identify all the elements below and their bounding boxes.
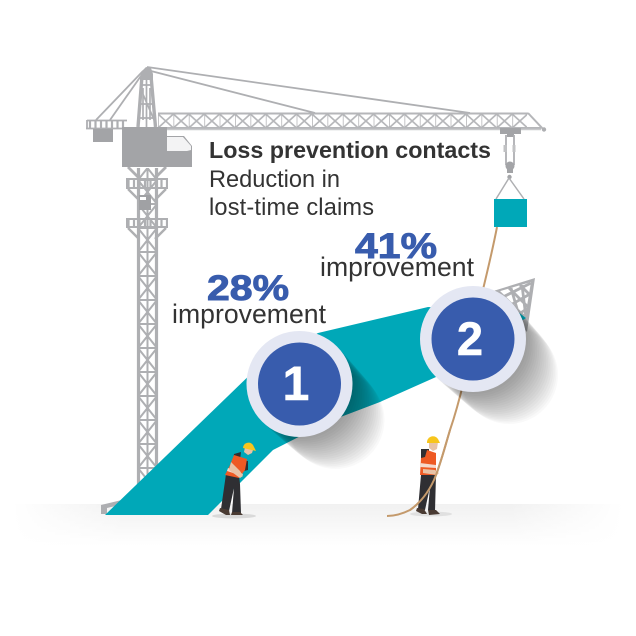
crane foot	[101, 498, 130, 514]
stat: 28% improvement	[172, 269, 327, 329]
stat: 28% improvement: improvement	[172, 299, 327, 329]
badge 1	[246, 331, 352, 437]
shadow: circle 1	[248, 333, 384, 469]
hook and load	[494, 128, 527, 227]
crane jib	[158, 113, 546, 132]
subheading: lost-time claims	[209, 195, 374, 221]
crane tower top	[138, 67, 156, 127]
subheading	[209, 167, 374, 221]
badge 1: 1	[283, 358, 309, 411]
teal load box	[494, 199, 527, 227]
badge 2: 2	[457, 312, 483, 365]
stat: 41% improvement: 41%	[355, 227, 437, 266]
rope over worker 2	[410, 430, 450, 510]
heading: Loss prevention contacts	[209, 137, 491, 163]
crane cab	[122, 127, 192, 167]
ground	[0, 504, 636, 546]
teal ribbon	[105, 307, 526, 515]
stat: 41% improvement	[320, 227, 475, 282]
crane stays	[96, 67, 470, 120]
crane	[86, 67, 546, 514]
stat: 41% improvement: improvement	[320, 252, 475, 282]
circle shadows	[248, 288, 558, 469]
upper truss	[490, 278, 535, 332]
crane mast	[138, 168, 157, 490]
worker 1	[212, 443, 256, 518]
subheading: Reduction in	[209, 167, 340, 193]
rope	[387, 227, 497, 516]
shadow: circle 2	[422, 288, 558, 424]
crane counter jib	[86, 120, 127, 142]
badge 2	[420, 286, 526, 392]
stat: 28% improvement: 28%	[207, 269, 289, 308]
crane platforms	[126, 167, 168, 239]
worker 2	[410, 436, 452, 516]
